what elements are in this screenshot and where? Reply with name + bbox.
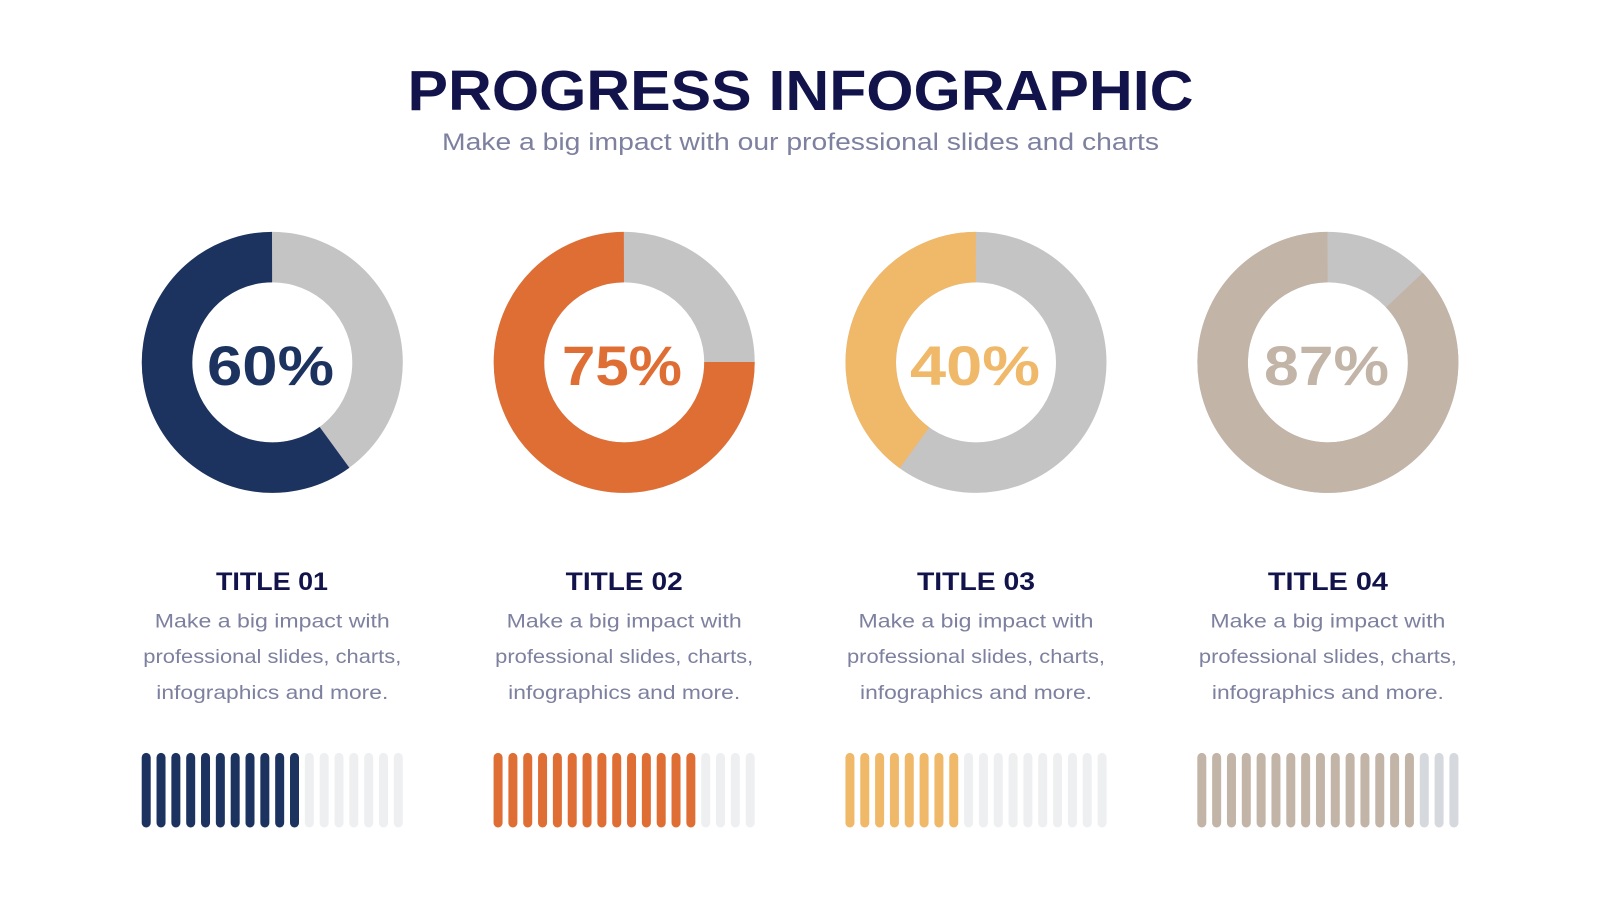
heading: title 03: TITLE 03 — [917, 568, 1035, 596]
text block: description 1: Make a big impact with — [155, 610, 390, 632]
text block: description 3 — [847, 610, 1105, 704]
progress bars: 14 of 18 — [494, 753, 755, 828]
donut chart: 87% — [1179, 214, 1477, 511]
text block: description 2: Make a big impact with — [507, 610, 742, 632]
text block: description 2 — [495, 610, 753, 704]
text block: description 4: Make a big impact with — [1210, 610, 1445, 632]
text block: description 4 — [1199, 610, 1457, 704]
donut chart: 40%: 40% — [910, 334, 1040, 397]
text block: description 1 — [143, 610, 401, 704]
text block: description 3: Make a big impact with — [858, 610, 1094, 632]
text block: description 2: infographics and more. — [508, 682, 740, 704]
text block: description 1: professional slides, charts, — [143, 646, 401, 668]
text block: description 3: infographics and more. — [860, 682, 1092, 704]
donut chart: 75% — [519, 257, 729, 468]
donut chart: 60% — [125, 215, 419, 509]
panel: column 1 — [125, 215, 419, 828]
title: PROGRESS INFOGRAPHIC — [408, 59, 1194, 122]
progress bars: 8 of 18 — [845, 753, 1107, 828]
heading: title 04: TITLE 04 — [1268, 568, 1388, 596]
progress bars: 15 of 18 — [1197, 753, 1458, 828]
text block: description 4: infographics and more. — [1212, 682, 1444, 704]
donut chart: 60%: 60% — [207, 334, 334, 397]
heading: title 02: TITLE 02 — [566, 568, 683, 596]
text block: description 4: professional slides, charts, — [1199, 646, 1457, 668]
text block: description 2: professional slides, charts, — [495, 646, 753, 668]
text block: description 1: infographics and more. — [156, 682, 388, 704]
heading: title 01: TITLE 01 — [216, 568, 328, 596]
panel: column 4 — [1179, 214, 1477, 828]
panel: column 3 — [829, 215, 1123, 828]
progress bars: 11 of 18 — [142, 753, 403, 828]
donut chart: 40% — [829, 215, 1123, 509]
panel: column 2 — [494, 257, 755, 827]
donut chart: 87%: 87% — [1264, 334, 1389, 397]
text block: description 3: professional slides, charts, — [847, 646, 1105, 668]
donut chart: 75%: 75% — [562, 334, 682, 397]
subtitle: Make a big impact with our professional slides and charts — [442, 129, 1159, 156]
